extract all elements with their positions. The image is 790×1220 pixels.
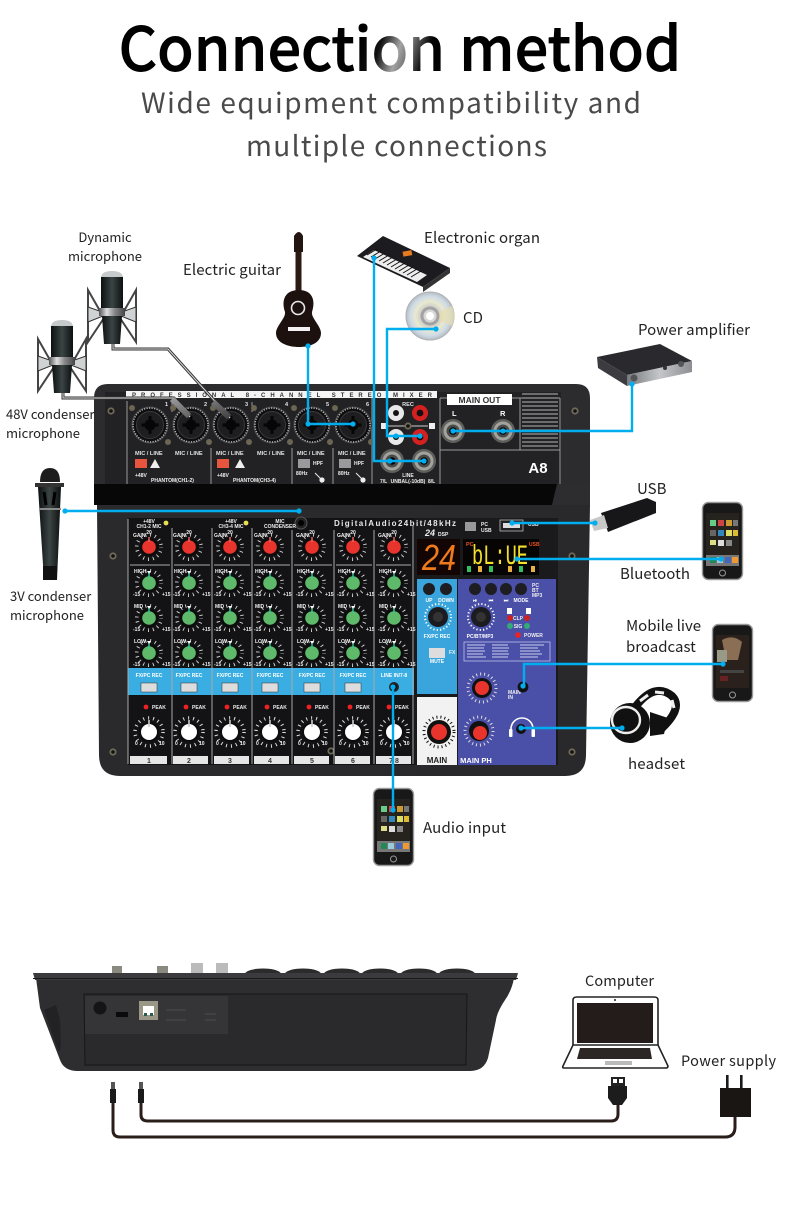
RCA REC and line jacks: 8/L — [428, 479, 435, 485]
icon: USB stick — [590, 498, 656, 532]
connection lines — [62, 255, 726, 813]
channel strip 6: FX/PC REC — [340, 673, 367, 679]
USB and PC toggle row: 24 — [424, 528, 435, 538]
channel strip 4: -15 — [254, 627, 261, 633]
channel strip 4: 10 — [280, 741, 286, 747]
label: electric guitar: Electric guitar — [183, 259, 281, 280]
channel strip 2: 2 — [187, 758, 191, 765]
purple media panel: POWER — [524, 633, 543, 639]
power button and USB ports — [85, 996, 228, 1034]
channel strip 5: -15 — [296, 592, 303, 598]
MAIN OUT section: R — [500, 409, 506, 418]
channel strip 5: -15 — [296, 627, 303, 633]
mixer rear input panel: PHANTOM(CH1-2) — [151, 478, 194, 484]
rear power cable — [110, 1082, 735, 1137]
channel strip 5: FX/PC REC — [299, 673, 326, 679]
channel strip 7/8: -15 — [378, 627, 385, 633]
channel strip 3: +15 — [243, 592, 252, 598]
blue FX panel: UP — [426, 598, 433, 604]
USB and PC toggle row: USB — [481, 528, 492, 534]
mixer: top view — [94, 384, 590, 776]
channel strip 4: +15 — [283, 662, 292, 668]
channel strip 4: -15 — [254, 592, 261, 598]
channel strip 7/8: LINE IN/7-8 — [381, 673, 407, 679]
arrow: mobile live — [520, 661, 726, 689]
channel strip 1: -15 — [133, 592, 140, 598]
label: 3V condenser microphone — [10, 586, 92, 624]
red 24 display: 24 — [421, 537, 456, 578]
channel strip 7/8: HIGH — [379, 569, 392, 575]
channel strip 2: +15 — [202, 662, 211, 668]
RCA REC and line jacks: LINE — [402, 473, 414, 479]
channel strip 7/8: MID — [379, 604, 389, 610]
channel strip 4: PEAK — [273, 705, 287, 711]
subtitle: Wide equipment compatibility and — [141, 82, 641, 122]
mixer rear input panel: 4 — [285, 402, 289, 408]
channel strip 3: -15 — [214, 662, 221, 668]
channel strip 5: 5 — [310, 758, 314, 765]
channel strip 7/8: GAIN — [378, 533, 391, 539]
title: Connection method — [119, 2, 681, 87]
label: bluetooth: Bluetooth — [620, 563, 690, 584]
channel strip 4: FX/PC REC — [257, 673, 284, 679]
channel strip 2: 0 — [175, 741, 178, 747]
MAIN OUT section — [441, 394, 558, 477]
headphone-style mic jack — [295, 517, 307, 529]
channel strip 5: HIGH — [297, 569, 310, 575]
channel strip 5: -15 — [296, 662, 303, 668]
channel strip 1: 0 — [135, 741, 138, 747]
purple media panel: PC/BT/MP3 — [467, 634, 494, 640]
icon: 3V condenser microphone — [35, 468, 64, 580]
icon: laptop — [563, 997, 668, 1068]
mixer rear input panel — [94, 384, 590, 505]
mixer rear input panel: MIC / LINE — [257, 451, 285, 457]
arrow: guitar to channels 5-6 — [305, 343, 356, 427]
channel strip 1: +15 — [162, 627, 171, 633]
phantom labels — [136, 519, 296, 530]
mixer rear input panel: HPF — [313, 461, 323, 467]
channel strip 6: PEAK — [356, 705, 370, 711]
channel strip 7/8: -15 — [378, 592, 385, 598]
blue FX panel: MUTE — [430, 659, 445, 665]
mixer rear input panel: 2 — [204, 402, 207, 408]
channel strip 5: GAIN — [296, 533, 309, 539]
channel strip 6: -15 — [337, 627, 344, 633]
purple media panel: MAIN PH — [460, 756, 492, 765]
RCA REC and line jacks: REC — [402, 402, 414, 408]
channel strip 7/8: 0 — [380, 741, 383, 747]
channel strip 5: PEAK — [315, 705, 329, 711]
USB and PC toggle row: PC — [481, 522, 488, 528]
channel strip 4: HIGH — [255, 569, 268, 575]
purple media panel: CLP — [513, 616, 524, 622]
mixer rear input panel: MIC / LINE — [338, 451, 366, 457]
channel dividers — [128, 519, 413, 764]
channel strip 7/8: PEAK — [395, 705, 409, 711]
channel strip 1 — [130, 530, 171, 765]
subtitle — [141, 82, 641, 165]
channel strip 1: +15 — [162, 592, 171, 598]
purple media panel: MODE — [514, 598, 529, 604]
channel strip 1: HIGH — [134, 569, 147, 575]
channel strip 6: +15 — [366, 662, 375, 668]
purple media panel: MAIN — [508, 690, 521, 696]
label: dynamic microphone — [68, 227, 142, 265]
channel strip 6: 10 — [363, 741, 369, 747]
phantom labels: +48V — [143, 519, 156, 525]
channel strip 1: GAIN — [133, 533, 146, 539]
channel strip 3: HIGH — [215, 569, 228, 575]
phantom labels: CH3-4 MIC — [218, 524, 244, 530]
channel strip 1: -15 — [133, 662, 140, 668]
icon: mobile live broadcast phone — [712, 624, 752, 702]
channel strip 3: PEAK — [233, 705, 247, 711]
channel strip 3: 0 — [216, 741, 219, 747]
white MAIN panel — [417, 697, 457, 765]
channel strip 6: LOW — [338, 639, 350, 645]
channel strip 5: +15 — [325, 662, 334, 668]
channel strip 1: +15 — [162, 662, 171, 668]
channel strip 2: LOW — [174, 639, 186, 645]
channel strip 2: PEAK — [192, 705, 206, 711]
arrow: CD to RCA — [387, 326, 439, 439]
arrow: 3V mic to mic jack — [62, 508, 302, 514]
USB and PC toggle row — [424, 520, 539, 538]
channel strip 3: 20 — [227, 530, 233, 536]
channel strip 6: +15 — [366, 627, 375, 633]
bLUE multicolour display: bL:UE — [472, 542, 528, 573]
channel strip 7/8 — [376, 530, 416, 765]
channel strip 5: LOW — [297, 639, 309, 645]
label: headset: headset — [628, 753, 685, 774]
channel strip 5: 0 — [298, 741, 301, 747]
channel strip 2: -15 — [173, 662, 180, 668]
channel strip 2: 20 — [186, 530, 192, 536]
label: USB: USB — [637, 478, 667, 499]
channel strip 3: +15 — [243, 627, 252, 633]
channel strip 1: 1 — [147, 758, 151, 765]
icon: CD — [406, 292, 454, 340]
panel heading: PROFESSIONAL 8-CHANNEL STEREO MIXER — [132, 393, 433, 399]
mixer rear input panel: +48V — [135, 473, 147, 479]
channel strip 7/8: 7 8 — [389, 758, 399, 765]
channel strip 7/8: +15 — [407, 662, 416, 668]
mixer rear input panel: MIC / LINE — [135, 451, 163, 457]
rear USB cable — [138, 1082, 618, 1121]
channel strip 7/8: LOW — [379, 639, 391, 645]
icon: USB plug — [608, 1077, 627, 1105]
channel strip 2: 10 — [199, 741, 205, 747]
label: 48V condenser microphone — [6, 404, 95, 442]
channel strip 2 — [173, 530, 211, 765]
channel strip 7/8: 20 — [391, 530, 397, 536]
channel strip 3: FX/PC REC — [217, 673, 244, 679]
mixer: rear view — [33, 963, 518, 1071]
channel strip 6: GAIN — [337, 533, 350, 539]
purple media panel: ⏮ — [489, 598, 494, 604]
purple media panel: SIG — [514, 624, 522, 630]
channel strip 7/8: +15 — [407, 592, 416, 598]
label: power supply: Power supply — [681, 1050, 776, 1071]
channel strip 6: 6 — [351, 758, 355, 765]
arrow: line in to phone — [390, 684, 396, 813]
label: mobile live broadcast: Mobile live — [626, 615, 701, 636]
channel strip 4: +15 — [283, 627, 292, 633]
white MAIN panel: MAIN — [427, 756, 447, 765]
mixer rear input panel: 3 — [245, 402, 248, 408]
channel strip 5: +15 — [325, 592, 334, 598]
channel strip 4: 20 — [267, 530, 273, 536]
mixer rear input panel: MIC / LINE — [175, 451, 203, 457]
channel strip 4: 0 — [256, 741, 259, 747]
channel strip 1: LOW — [134, 639, 146, 645]
channel strip 2: -15 — [173, 592, 180, 598]
channel strip 4: 4 — [268, 758, 272, 765]
channel strip 2: MID — [174, 604, 184, 610]
channel strip 4: -15 — [254, 662, 261, 668]
label: mobile live broadcast — [626, 615, 701, 657]
label: computer: Computer — [585, 970, 654, 991]
channel strip 6 — [335, 530, 375, 765]
digital audio heading: DigitalAudio24bit/48kHz — [334, 519, 456, 528]
label: 3V condenser microphone: microphone — [10, 605, 84, 624]
phantom power and HPF buttons — [135, 459, 366, 483]
channel strip 6: HIGH — [338, 569, 351, 575]
channel strip 3 — [214, 530, 252, 765]
channel strip 2: FX/PC REC — [176, 673, 203, 679]
bLUE multicolour display — [463, 539, 540, 575]
arrow: main out to amplifier — [450, 381, 635, 434]
channel strip 6: MID — [338, 604, 348, 610]
icon: headset — [610, 691, 676, 743]
icon: power amplifier — [597, 344, 692, 386]
icon: dynamic microphone — [88, 271, 136, 344]
channel strip 1: PEAK — [152, 705, 166, 711]
RCA REC and line jacks: UNBAL(-10dB) — [391, 479, 426, 485]
arrow: organ to line jacks — [371, 255, 427, 464]
channel strip 5: MID — [297, 604, 307, 610]
mixer control face — [97, 505, 590, 776]
label: CD: CD — [463, 307, 483, 328]
icon: bluetooth phone — [702, 502, 742, 580]
channel strip 7/8: 10 — [404, 741, 410, 747]
channel strip 5: +15 — [325, 627, 334, 633]
mixer rear input panel: +48V — [217, 473, 229, 479]
icon: power plug — [720, 1075, 751, 1117]
mixer rear input panel: 80Hz — [338, 471, 350, 477]
blue FX panel: FX — [449, 650, 456, 656]
icon: audio input phone — [374, 788, 414, 866]
label: 48V condenser microphone: microphone — [6, 423, 80, 442]
bLUE multicolour display: PC — [466, 542, 474, 548]
channel strip 6: 0 — [339, 741, 342, 747]
label: electronic organ: Electronic organ — [424, 227, 540, 248]
channel strip 1: -15 — [133, 627, 140, 633]
channel strip 3: GAIN — [214, 533, 227, 539]
recessed panel — [84, 994, 467, 1065]
channel strip 7/8: +15 — [407, 627, 416, 633]
mixer rear input panel: 6 — [366, 402, 369, 408]
channel strip 1: 20 — [146, 530, 152, 536]
label: dynamic microphone: Dynamic — [78, 227, 132, 246]
channel strip 6: +15 — [366, 592, 375, 598]
blue FX band — [128, 668, 414, 695]
channel strip 3: 3 — [228, 758, 232, 765]
channel strip 3: -15 — [214, 592, 221, 598]
phantom labels: +48V — [225, 519, 238, 525]
arrow: headset — [518, 725, 625, 731]
purple media panel: BT — [532, 588, 539, 594]
mixer rear input panel: PHANTOM(CH3-4) — [233, 478, 276, 484]
channel strip 3: -15 — [214, 627, 221, 633]
icon: guitar — [276, 232, 321, 347]
USB and PC toggle row: DSP — [438, 532, 449, 538]
blue FX panel: DOWN — [438, 598, 454, 604]
channel strip 3: +15 — [243, 662, 252, 668]
phantom labels: MIC — [275, 519, 285, 525]
channel strip 2: -15 — [173, 627, 180, 633]
phantom labels: CH1-2 MIC — [136, 524, 162, 530]
channel strip 4: GAIN — [254, 533, 267, 539]
channel strip 3: LOW — [215, 639, 227, 645]
RCA REC and line jacks — [380, 402, 436, 485]
channel strip 7/8: -15 — [378, 662, 385, 668]
label: mobile live broadcast: broadcast — [626, 636, 696, 657]
channel strip 6: -15 — [337, 662, 344, 668]
purple media panel: IN — [508, 695, 513, 701]
label: audio input: Audio input — [423, 817, 506, 838]
channel strip 6: -15 — [337, 592, 344, 598]
channel strip 2: +15 — [202, 592, 211, 598]
rear chassis — [36, 978, 514, 1071]
channel strip 4: LOW — [255, 639, 267, 645]
label: power amplifier: Power amplifier — [638, 319, 750, 340]
channel strip 2: +15 — [202, 627, 211, 633]
channel strip 4: MID — [255, 604, 265, 610]
USB and PC toggle row: USB — [528, 522, 539, 528]
channel strip 3: 10 — [240, 741, 246, 747]
MAIN OUT section: MAIN OUT — [458, 395, 501, 405]
mic cables — [63, 343, 230, 418]
blue FX panel: FX/PC REC — [424, 634, 451, 640]
subtitle: multiple connections — [246, 125, 547, 165]
label: 3V condenser microphone: 3V condenser — [10, 586, 92, 605]
channel strip 1: FX/PC REC — [136, 673, 163, 679]
bLUE multicolour display: USB — [529, 542, 540, 548]
mixer rear input panel: 1 — [165, 402, 168, 408]
icon: electronic organ — [357, 236, 450, 292]
channel strip 3: MID — [215, 604, 225, 610]
mixer rear input panel: MIC / LINE — [297, 451, 325, 457]
mixer rear input panel: 5 — [326, 402, 329, 408]
channel strip 2: GAIN — [173, 533, 186, 539]
black fold band — [94, 484, 590, 505]
RCA REC and line jacks: 7/L — [380, 479, 387, 485]
rear jacks and domes — [112, 963, 475, 980]
purple media panel — [458, 579, 556, 765]
phantom labels: CONDENSER — [264, 524, 296, 530]
purple media panel: MP3 — [532, 593, 542, 599]
mixer rear input panel: 80Hz — [296, 471, 308, 477]
mixer rear input panel: HPF — [354, 461, 364, 467]
channel strip 2: HIGH — [174, 569, 187, 575]
blue FX panel — [417, 579, 457, 694]
MAIN OUT section: A8 — [528, 460, 548, 477]
mixer rear input panel: MIC / LINE — [216, 451, 244, 457]
purple media panel: PC — [532, 583, 539, 589]
channel strip 1: 10 — [159, 741, 165, 747]
arrow: bluetooth — [514, 556, 724, 562]
purple media panel: ⏭ — [504, 598, 509, 604]
MAIN OUT section: L — [452, 409, 457, 418]
label: 48V condenser microphone: 48V condenser — [6, 404, 95, 423]
arrow: USB stick — [509, 520, 598, 526]
XLR combo jacks — [129, 405, 374, 445]
channel strip 4 — [254, 530, 292, 765]
purple media panel: ⏯ — [473, 598, 477, 604]
channel strip 5 — [294, 530, 334, 765]
icon: 48V condenser microphone — [38, 320, 86, 393]
label: dynamic microphone: microphone — [68, 246, 142, 265]
channel strip 5: 20 — [309, 530, 315, 536]
channel strip 1: MID — [134, 604, 144, 610]
channel strip 5: 10 — [322, 741, 328, 747]
channel strip 6: 20 — [350, 530, 356, 536]
channel strip 4: +15 — [283, 592, 292, 598]
